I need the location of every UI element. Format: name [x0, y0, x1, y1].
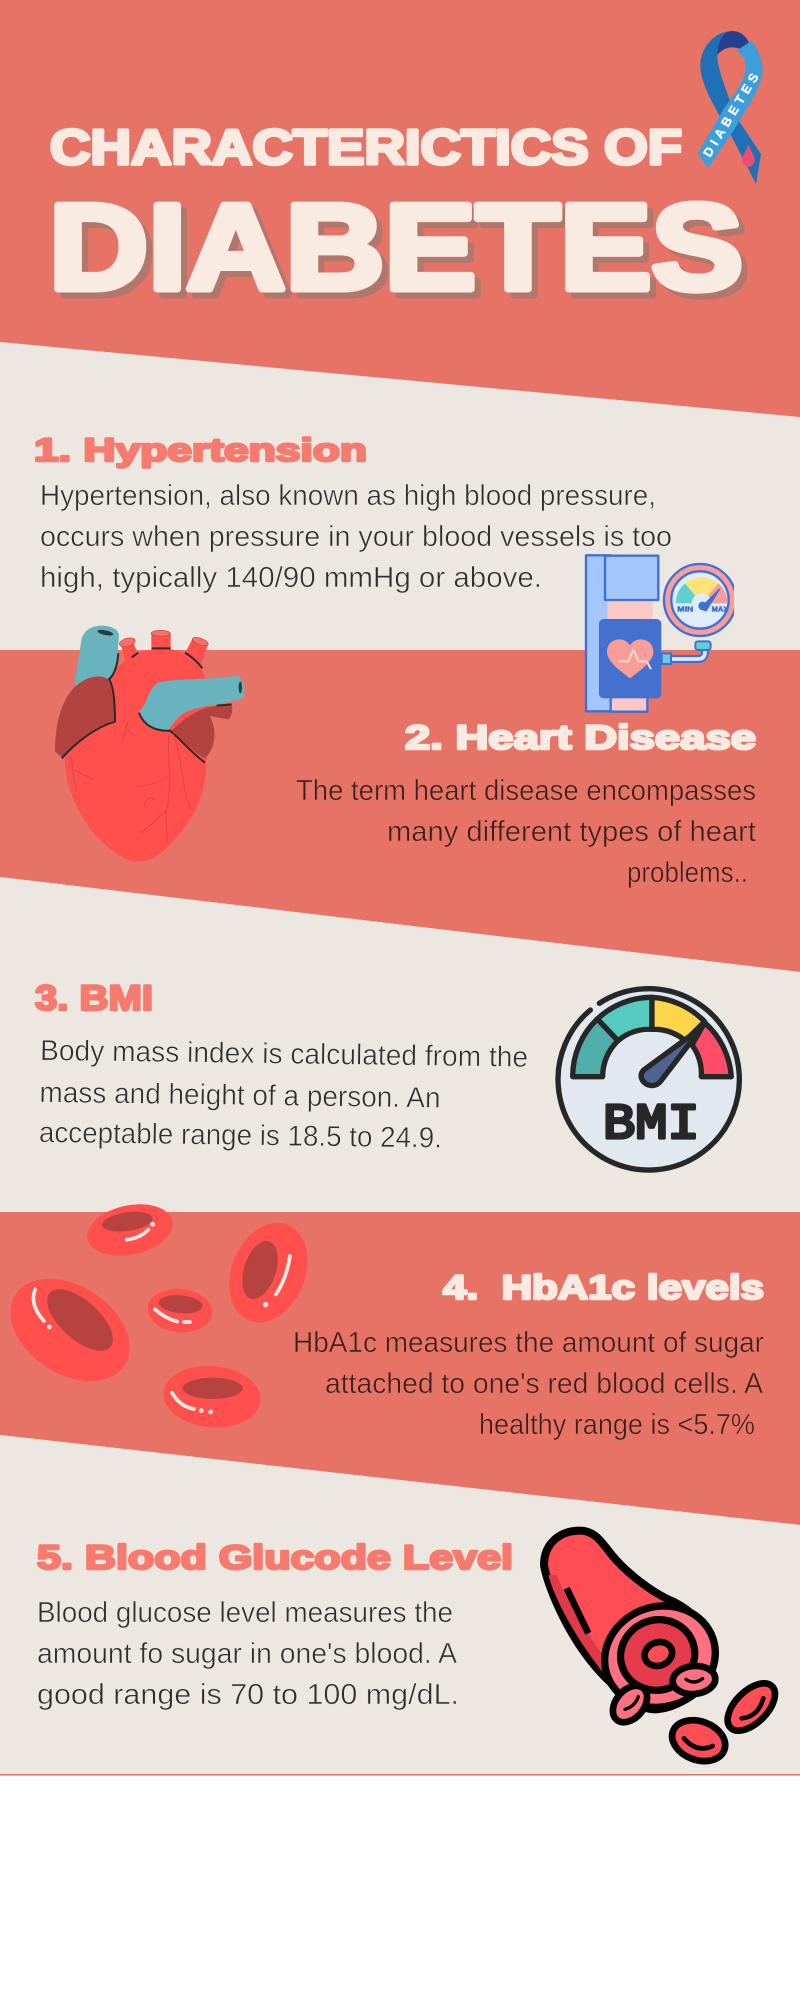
panel: heart disease section — [0, 650, 800, 972]
text block: blood glucose description: amount fo sugar in one's blood. A — [37, 1638, 458, 1670]
heading: 2. Heart Disease: 2. Heart Disease — [405, 719, 756, 757]
icon: diabetes awareness ribbon: DIABETES — [701, 71, 761, 160]
text block: hypertension description — [40, 480, 672, 594]
icon: anatomical heart — [55, 626, 244, 862]
title: Diabetes with drop shadow: DIABETES — [55, 185, 749, 321]
icon: BMI gauge: BMI — [603, 1097, 700, 1154]
panel: BMI section — [0, 877, 800, 1212]
icon: blood pressure monitor — [586, 555, 736, 712]
text block: heart disease description: problems.. — [627, 857, 748, 889]
heading: 5. Blood Glucode Level: 5. Blood Glucode Level — [37, 1539, 513, 1577]
text block: BMI description: acceptable range is 18.5 to 24.9. — [39, 1117, 442, 1155]
panel: HbA1c section — [0, 1212, 800, 1525]
text block: hypertension description: occurs when pressure in your blood vessels is too — [40, 521, 672, 553]
cell: right — [215, 1211, 322, 1334]
icon: blood vessel with cells — [544, 1531, 783, 1768]
text block: blood glucose description: Blood glucose level measures the — [37, 1597, 453, 1629]
panel: blood glucose section — [0, 1435, 800, 1774]
cell: large left — [0, 1258, 148, 1402]
text block: HbA1c description: HbA1c measures the amount of sugar — [293, 1327, 764, 1359]
heading: 4. HbA1c levels: 4. HbA1c levels — [443, 1269, 764, 1307]
text block: blood glucose description — [37, 1597, 459, 1711]
heading: 1. Hypertension: 1. Hypertension — [34, 432, 367, 468]
panel: hypertension section — [0, 342, 800, 650]
icon: blood pressure monitor: MAX — [712, 604, 728, 613]
text block: heart disease description: The term heart disease encompasses — [296, 775, 756, 807]
cell: top — [82, 1197, 177, 1263]
text block: BMI description: mass and height of a person. An — [39, 1077, 441, 1115]
text block: BMI description — [39, 1035, 528, 1156]
cell: centre — [146, 1286, 214, 1336]
text block: hypertension description: Hypertension, also known as high blood pressure, — [40, 480, 656, 512]
cell: bottom — [161, 1362, 263, 1431]
text block: heart disease description — [296, 775, 756, 889]
panel: header band — [0, 0, 800, 420]
text block: HbA1c description: attached to one's red blood cells. A — [325, 1368, 764, 1400]
title line: Characterictics of: CHARACTERICTICS OF — [50, 121, 682, 175]
text block: heart disease description: many different types of heart — [387, 816, 756, 848]
heading: 3. BMI: 3. BMI — [35, 979, 153, 1018]
text block: HbA1c description: healthy range is <5.7% — [479, 1409, 755, 1441]
text block: BMI description: Body mass index is calculated from the — [40, 1035, 528, 1074]
text block: HbA1c description — [293, 1327, 764, 1441]
title: Diabetes with drop shadow: DIABETES — [49, 179, 743, 315]
text block: hypertension description: high, typically 140/90 mmHg or above. — [40, 562, 542, 594]
icon: red blood cells — [0, 1197, 322, 1431]
bottom rule — [0, 1774, 800, 1776]
text block: blood glucose description: good range is 70 to 100 mg/dL. — [37, 1679, 459, 1711]
icon: diabetes awareness ribbon — [698, 31, 763, 184]
icon: BMI gauge — [558, 986, 743, 1170]
icon: blood pressure monitor: MIN — [677, 604, 693, 613]
